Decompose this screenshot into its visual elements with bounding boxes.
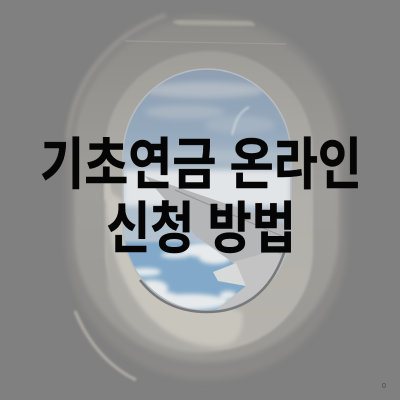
contrail — [232, 107, 249, 135]
outer window surround — [66, 15, 347, 380]
title: 신청 방법 — [106, 197, 296, 260]
airplane window illustration — [65, 14, 344, 382]
aircraft wing — [145, 176, 291, 311]
upper vent slots — [125, 20, 286, 44]
clouds high — [123, 82, 291, 206]
white clouds — [129, 243, 236, 310]
inner bezel — [104, 51, 313, 353]
title — [40, 133, 362, 260]
title: 기초연금 온라인 — [40, 133, 362, 196]
lower sky — [126, 241, 246, 294]
window gasket — [123, 69, 291, 311]
window glass view — [123, 69, 291, 311]
small watermark glyph: 0 — [382, 383, 386, 390]
